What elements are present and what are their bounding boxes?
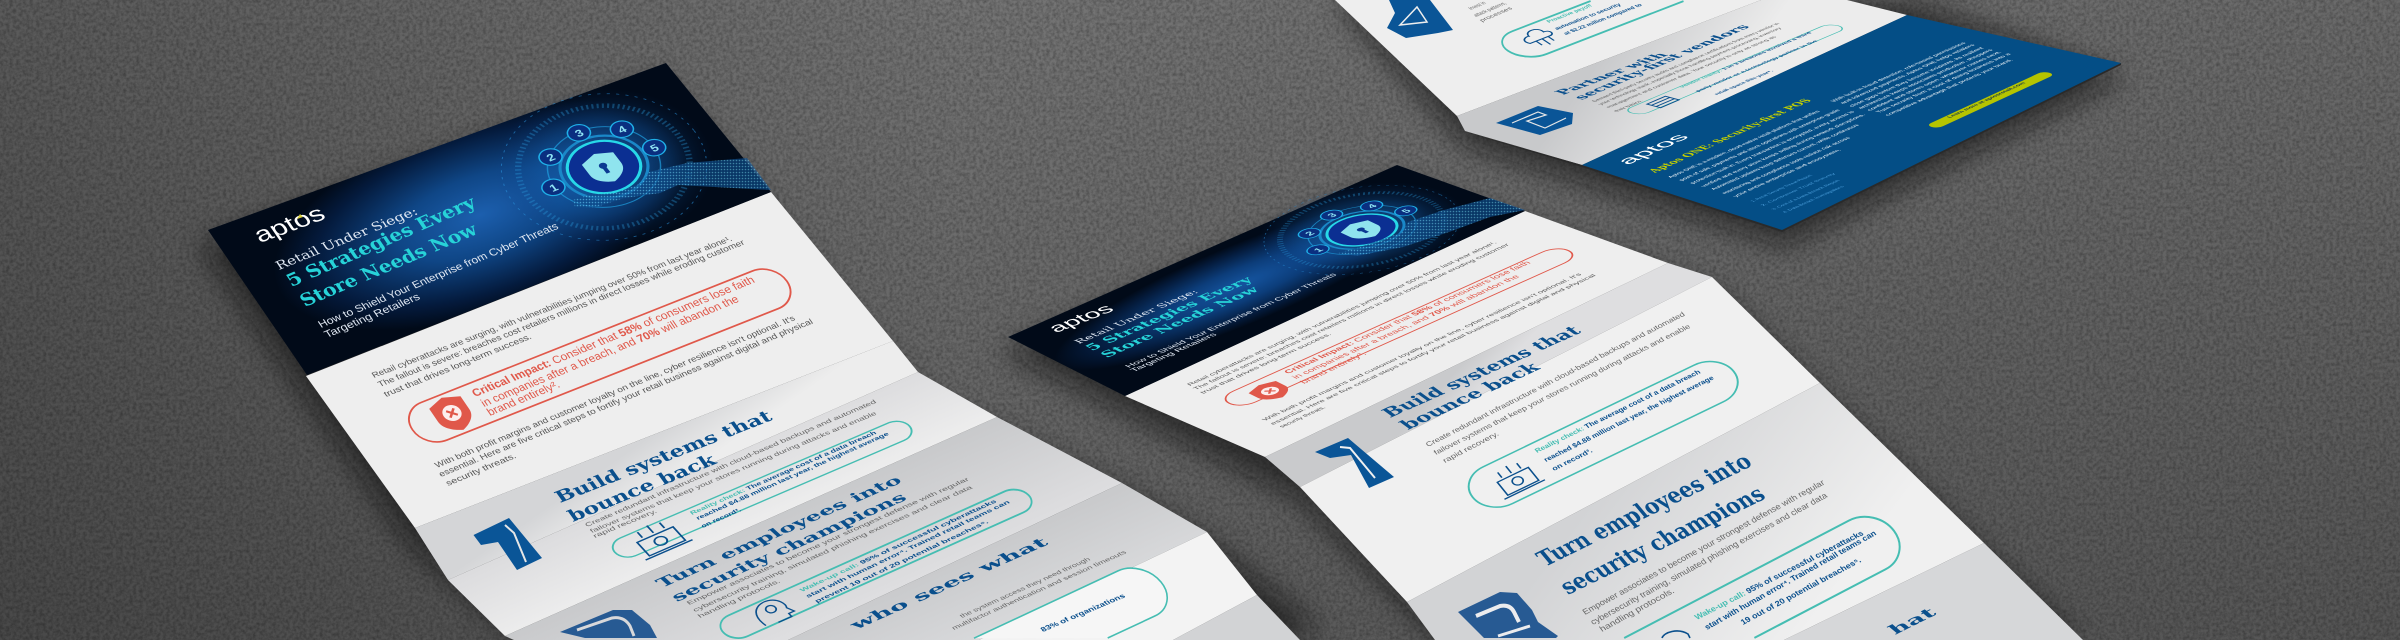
subtitle: Targeting Retailers (1128, 332, 1219, 373)
security ring graphic: 1 (547, 181, 561, 194)
stat pill: on record³. (700, 507, 743, 529)
strategy 1 (1315, 310, 1748, 516)
leaflet: left (208, 60, 1300, 640)
heading (652, 473, 911, 605)
footer text left: verified and every store keeps selling during network disruptions. (1700, 113, 1868, 188)
stat pill: automation to security (1553, 2, 1624, 31)
intro text 2: essential. Here are five critical steps to fortify your retail business against digital and physical (1269, 273, 1598, 426)
footer text right: and tokenized payments, Aptos ONE helps retailers (1839, 44, 1977, 105)
number 1 (474, 518, 542, 570)
stat pill (1502, 1, 1684, 57)
footer text left: Aptos ONE is a modern, cloud-native retail platform that unifies (1667, 110, 1822, 179)
title: Retail Under Siege: (1071, 288, 1201, 345)
intro text 2: security threats. (444, 451, 518, 488)
icon: shield alert (1245, 379, 1296, 403)
intro text: Retail cyberattacks are surging, with vulnerabilities jumping over 50% from last year alone¹. (370, 234, 734, 380)
number 2 (560, 610, 657, 638)
stat pill: 19 out of 20 potential breaches⁵. (1739, 556, 1863, 627)
button: Learn more at aptosretail.com (1946, 82, 2028, 119)
footer text right: confident and stores open, whatever comes next. (1866, 51, 2004, 112)
heading (551, 407, 777, 526)
references (1749, 172, 1846, 213)
heading: bounce back (1396, 360, 1546, 433)
heading: security champions (667, 490, 911, 605)
icon: cloud (1517, 26, 1562, 50)
heading: Build systems that (551, 407, 777, 507)
strategy 2 (560, 473, 1032, 638)
body (1467, 1, 1514, 23)
stat pill: Proactive payoff (1545, 3, 1595, 24)
intro text 2: security threats. (1278, 406, 1328, 429)
intro text: The fallout is severe: breaches cost retailers millions in direct losses while eroding customer (1192, 243, 1512, 391)
footer text left (1667, 109, 1868, 198)
number 4 (1387, 0, 1453, 38)
logo: aptos (1612, 132, 1695, 166)
strategy 1 (474, 398, 917, 570)
callout: critical impact: brand entirely². (484, 379, 563, 418)
title: Store Needs Now (1096, 284, 1264, 360)
heading: Turn employees into (1532, 449, 1758, 572)
heading: Partner with (1551, 51, 1673, 96)
strategy 3 (845, 534, 1167, 638)
logo: aptos (1044, 302, 1119, 336)
icon: laptop shield (1486, 456, 1545, 499)
footer text left: protection built in. Every transaction is encrypted, every access is (1689, 111, 1857, 185)
callout: critical impact: Critical Impact: Consider that 58% of consumers lose faith (470, 275, 757, 399)
leaflet: centre (1008, 163, 2083, 640)
stat pill (1458, 353, 1748, 516)
callout: critical impact (400, 262, 800, 449)
callout: critical impact: in companies after a breach, and 70% will abandon the (1290, 274, 1522, 380)
body: failover systems that keep your stores running during attacks and enable (1432, 322, 1692, 456)
heading: security champions (1555, 482, 1771, 600)
intro text: trust that drives long-term success. (382, 332, 533, 399)
hand (573, 158, 771, 208)
security ring graphic (455, 60, 753, 274)
body: Empower associates to become your strongest defense with regular (1580, 477, 1827, 617)
heading: Turn employees into (652, 473, 906, 591)
security ring graphic: 1 (1312, 247, 1327, 254)
button (1926, 71, 2055, 129)
stat pill: party vendor or a technology partner in the (1694, 40, 1820, 93)
icon: head (1662, 631, 1690, 638)
title: 5 Strategies Every (1081, 274, 1257, 353)
security ring graphic (1215, 163, 1509, 297)
stat pill (1623, 23, 1847, 116)
stat pill: Wake-up call: 95% of successful cyberattacks (798, 498, 998, 593)
intro text 2: With both profit margins and customer loyalty on the line, cyber resilience isn't optional. It's (1261, 272, 1584, 422)
footer text left: your entire enterprise and ecosystem. (1732, 149, 1844, 198)
page folds (1125, 211, 2083, 640)
intro text: The fallout is severe: breaches cost retailers millions in direct losses while eroding customer (376, 237, 747, 389)
intro text: trust that drives long-term success. (1199, 332, 1333, 395)
logo: aptos (248, 201, 330, 247)
hero banner (208, 60, 771, 375)
icon: server (1647, 96, 1679, 108)
stat pill: at $2.22 million compared to (1562, 3, 1644, 36)
stat pill (974, 568, 1167, 638)
body (685, 476, 975, 619)
body: Create redundant infrastructure with cloud-based backups and automated (583, 398, 878, 528)
intro text 2: essential. Here are five critical steps to fortify your retail business against digital and physical (437, 317, 815, 479)
stat pill: start with human error⁴. Trained retail teams can (1703, 529, 1878, 632)
body: handling protocols. (696, 578, 782, 619)
icon: shield alert (426, 392, 479, 436)
references: 1. Retail Security Threat Report (1749, 174, 1814, 202)
stat pill: Reality check: The average cost of a data breach (1533, 368, 1702, 454)
subtitle: How to Shield Your Enterprise from Cyber Threats (316, 221, 561, 330)
footer text right: With built-in fraud detection, role-based permissions (1830, 42, 1968, 103)
body: rapid recovery. (591, 508, 659, 539)
stat pill: Reality check: The average cost of a data breach (689, 430, 878, 516)
footer heading: Aptos ONE: Security-first POS (1644, 97, 1815, 174)
security ring graphic: 5 (1400, 208, 1414, 215)
callout: critical impact (1218, 245, 1580, 409)
footer text right: architecture keeps associates productive, shoppers (1857, 49, 1995, 110)
footer text left: Automated updates keep defenses current, while continuous (1710, 124, 1861, 191)
stat pill: Wake-up call: 95% of successful cyberattacks (1693, 529, 1866, 622)
stat pill: reached $4.88 million last year, the highest average (1542, 374, 1716, 463)
page folds (1335, 0, 1907, 165)
body: Empower associates to become your strongest defense with regular (685, 476, 972, 606)
stat pill: prevent 19 out of 20 potential breaches⁵. (813, 519, 990, 604)
footer text left: point of sale, payments and store operations with enterprise-grade (1678, 109, 1842, 182)
icon: head (749, 595, 797, 628)
body: cybersecurity training, simulated phishing exercises and clear data (1588, 490, 1829, 627)
footer text right: close gaps before they become incidents. Its resilient (1848, 47, 1986, 108)
stat pill (1624, 517, 1900, 638)
security ring graphic: 2 (544, 151, 558, 164)
hero banner (1008, 163, 1525, 396)
icon: laptop shield (623, 515, 693, 560)
strategy 4 (1387, 0, 1684, 57)
references: 3. Cost of a Data Breach Report (1770, 179, 1842, 210)
hand (1337, 198, 1525, 256)
subtitle: How to Shield Your Enterprise from Cyber Threats (1123, 272, 1339, 369)
panel: aptos ONE footer (1465, 15, 2121, 232)
title: Store Needs Now (296, 219, 483, 311)
body: their basics. (1613, 100, 1645, 113)
body: handling protocols. (1597, 586, 1676, 634)
references: 2. Consumer Trust Survey (1759, 172, 1838, 206)
stat pill (607, 417, 917, 561)
page folds (306, 192, 1300, 640)
body: the system access they need through (958, 556, 1092, 619)
heading: security-first vendors (1570, 23, 1755, 101)
intro text: Retail cyberattacks are surging, with vulnerabilities jumping over 50% from last year alone¹. (1186, 241, 1499, 387)
body: failover systems that keep your stores running during attacks and enable (588, 410, 878, 534)
strategy 3 heading: hat (1884, 604, 1942, 638)
body: cybersecurity training, simulated phishing exercises and clear data (691, 484, 975, 613)
heading (1378, 323, 1586, 433)
callout: critical impact: Critical Impact: Consider that 58% of consumers lose faith (1282, 260, 1533, 375)
heading: Build systems that (1378, 323, 1586, 421)
references: 4. Data Breach Investigations (1781, 185, 1846, 213)
intro text 2: With both profit margins and customer loyalty on the line, cyber resilience isn't optional. It's (433, 313, 797, 470)
footer text right: competitive advantage that protects your brand. (1884, 59, 2016, 117)
stat pill: reached $4.88 million last year, the highest average (695, 431, 891, 521)
security ring graphic: 3 (572, 127, 587, 140)
stat pill (720, 490, 1032, 638)
body: Create redundant infrastructure with cloud-based backups and automated (1424, 310, 1687, 448)
heading: who sees what (845, 534, 1053, 633)
strategy 5 (1496, 23, 1847, 135)
leaflet: top right (1335, 0, 2121, 232)
security ring graphic: 4 (1366, 203, 1380, 210)
stat pill: retail space this year⁸. (1713, 70, 1776, 96)
body: processes (1478, 6, 1514, 23)
stat pill: Vendor reality: 1 in 3 breaches involved a third (1678, 32, 1814, 89)
stat pill: 83% of organizations (1039, 592, 1127, 633)
title: 5 Strategies Every (282, 192, 481, 291)
callout: critical impact: in companies after a breach, and 70% will abandon the (478, 293, 741, 409)
security ring graphic: 5 (647, 142, 662, 154)
body: Demand third-party security audits and compliance certifications from every vendor in (1591, 23, 1782, 103)
security ring graphic: 4 (615, 123, 630, 136)
body: your technology stack, especially those handling payment processing, inventory (1597, 27, 1784, 106)
stat pill: start with human error⁴. Trained retail teams can (804, 499, 1012, 599)
number 2 (1458, 592, 1558, 638)
body: multifactor authentication and session timeouts (950, 549, 1129, 631)
security ring graphic: 2 (1303, 230, 1318, 237)
title: Retail Under Siege: (272, 204, 420, 272)
stat pill: on record³. (1550, 447, 1594, 472)
footer text left: monitoring and compliance tools reduce risk across (1721, 137, 1853, 195)
number 5 (1496, 106, 1573, 135)
strategy 2 (1458, 449, 1900, 638)
heading (1551, 23, 1755, 101)
number 1 (1315, 438, 1394, 488)
callout: critical impact: brand entirely². (1298, 351, 1369, 385)
body: rapid recovery. (1441, 430, 1501, 464)
heading: bounce back (564, 451, 721, 526)
intro text 2 (433, 313, 815, 488)
body: management and customer data. Your security is only as strong as (1605, 36, 1779, 109)
footer text right (1830, 42, 2016, 117)
security ring graphic: 3 (1326, 212, 1340, 219)
footer text right: Turn security from a cost of doing business into a (1875, 53, 2014, 114)
subtitle: Targeting Retailers (322, 291, 422, 340)
